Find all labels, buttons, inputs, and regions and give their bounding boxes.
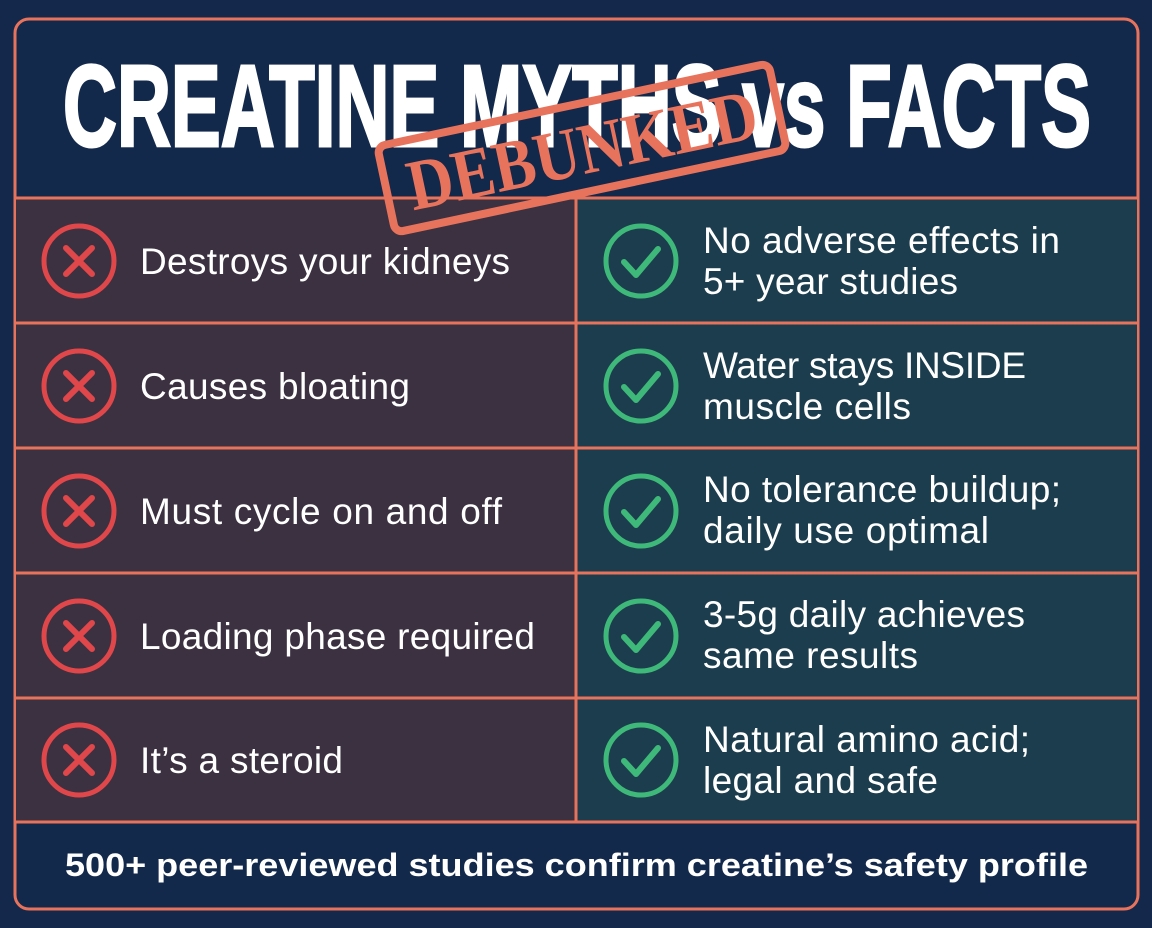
row 2 myth (44, 351, 410, 421)
row 2 fact: Water stays INSIDE (703, 345, 1026, 386)
row 2 fact (606, 345, 1026, 427)
row 3 fact: daily use optimal (703, 510, 989, 551)
row 1 myth (44, 226, 510, 296)
row 5 fact: Natural amino acid; (703, 719, 1030, 760)
row 5 fact: legal and safe (703, 760, 938, 801)
row 4 myth (44, 601, 535, 671)
row 5 fact (606, 719, 1030, 801)
row 1 fact (606, 220, 1060, 302)
stamp: debunked: DEBUNKED (400, 74, 765, 226)
row 4 fact: same results (703, 635, 918, 676)
row 5 myth: It’s a steroid (140, 740, 343, 781)
row 3 fact: No tolerance buildup; (703, 469, 1061, 510)
row 3 myth (44, 476, 503, 546)
row 5 myth (44, 725, 343, 795)
row 1 myth: Destroys your kidneys (140, 241, 510, 282)
row 4 fact: 3-5g daily achieves (703, 594, 1025, 635)
row 4 myth: Loading phase required (140, 616, 535, 657)
row 3 fact (606, 469, 1061, 551)
row 1 fact: 5+ year studies (703, 261, 958, 302)
row 3 myth: Must cycle on and off (140, 491, 503, 532)
footer: 500+ peer-reviewed studies confirm creatine’s safety profile (65, 847, 1088, 883)
row 1 fact: No adverse effects in (703, 220, 1060, 261)
myth rows (44, 226, 535, 795)
row 4 fact (606, 594, 1025, 676)
row 2 myth: Causes bloating (140, 366, 410, 407)
row 2 fact: muscle cells (703, 386, 911, 427)
fact rows (606, 220, 1061, 801)
